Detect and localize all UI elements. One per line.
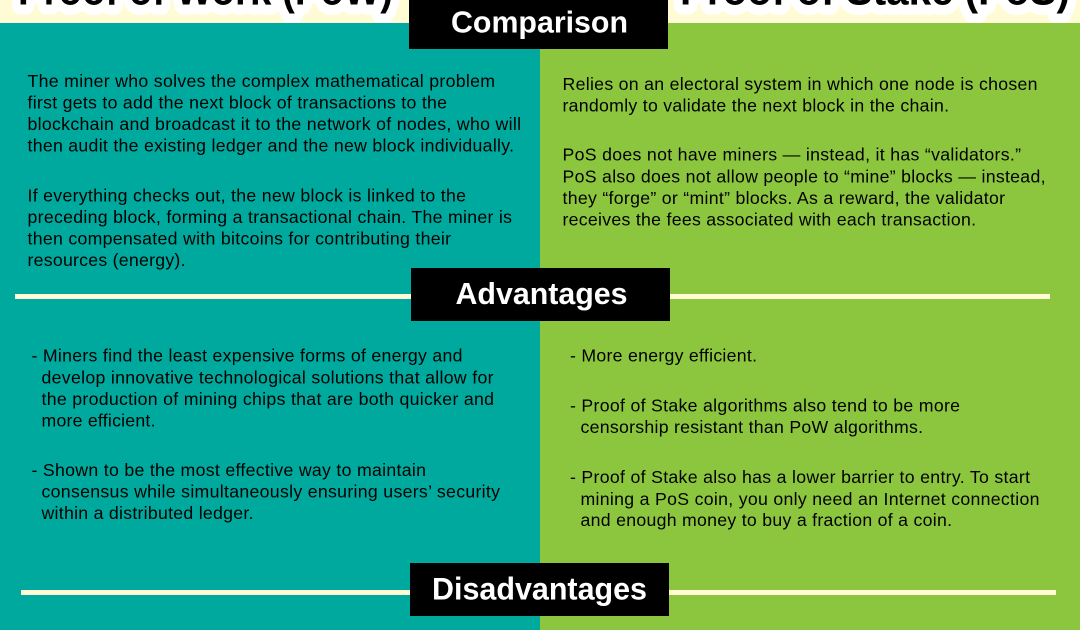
text block: proof of work comparison: resources (energy). — [28, 250, 186, 270]
text block: proof of work advantages: develop innovative technological solutions that allow for — [42, 368, 494, 388]
heading: advantages — [15, 268, 1050, 321]
heading: comparison: Comparison — [451, 6, 628, 40]
text block: proof of work advantages: within a distributed ledger. — [40, 503, 254, 523]
panel: proof of stake — [540, 23, 1080, 630]
text block: proof of work comparison: preceding block, forming a transactional chain. The miner is — [28, 207, 512, 227]
panel: proof of work — [0, 23, 540, 630]
text block: proof of work comparison — [28, 71, 521, 270]
text block: proof of stake advantages: and enough money to buy a fraction of a coin. — [580, 510, 952, 530]
text block: proof of stake advantages: - Proof of Stake also has a lower barrier to entry. To start — [570, 467, 1030, 487]
heading: comparison — [409, 0, 668, 49]
text block: proof of work comparison: blockchain and broadcast it to the network of nodes, who will — [28, 114, 521, 134]
text block: proof of work advantages: - Shown to be the most effective way to maintain — [32, 460, 426, 480]
heading: disadvantages — [21, 563, 1056, 616]
text block: proof of work advantages: the production of mining chips that are both quicker and — [42, 389, 494, 409]
heading: disadvantages: Disadvantages — [432, 570, 647, 606]
text block: proof of stake comparison: PoS does not have miners — instead, it has “validators.” — [562, 144, 1021, 164]
text block: proof of stake comparison: receives the fees associated with each transaction. — [562, 210, 976, 230]
text block: proof of work advantages: consensus while simultaneously ensuring users’ security — [42, 482, 500, 502]
text block: proof of stake comparison: they “forge” or “mint” blocks. As a reward, the validator — [562, 188, 1005, 208]
text block: proof of work advantages: - Miners find the least expensive forms of energy and — [32, 346, 462, 366]
text block: proof of work comparison: If everything checks out, the new block is linked to the — [28, 186, 466, 206]
text block: proof of stake advantages: censorship resistant than PoW algorithms. — [580, 417, 923, 437]
heading: advantages: Advantages — [456, 277, 628, 311]
text block: proof of stake comparison: randomly to validate the next block in the chain. — [562, 96, 949, 116]
text block: proof of stake advantages — [570, 346, 1040, 530]
text block: proof of stake comparison: PoS also does not allow people to “mine” blocks — instead, — [562, 166, 1046, 186]
text block: proof of stake comparison — [562, 74, 1046, 230]
text block: proof of work comparison: then compensated with bitcoins for contributing their — [28, 228, 451, 248]
text block: proof of stake advantages: mining a PoS coin, you only need an Internet connection — [580, 489, 1040, 509]
text block: proof of stake advantages: - More energy efficient. — [570, 346, 757, 366]
text block: proof of work comparison: first gets to add the next block of transactions to the — [28, 92, 447, 112]
text block: proof of work advantages — [32, 346, 500, 523]
text block: proof of stake advantages: - Proof of Stake algorithms also tend to be more — [570, 396, 960, 416]
text block: proof of work comparison: then audit the existing ledger and the new block individually. — [28, 136, 514, 156]
text block: proof of stake comparison: Relies on an electoral system in which one node is chosen — [562, 74, 1038, 94]
text block: proof of work advantages: more efficient. — [42, 410, 156, 430]
text block: proof of work comparison: The miner who solves the complex mathematical problem — [28, 71, 495, 91]
